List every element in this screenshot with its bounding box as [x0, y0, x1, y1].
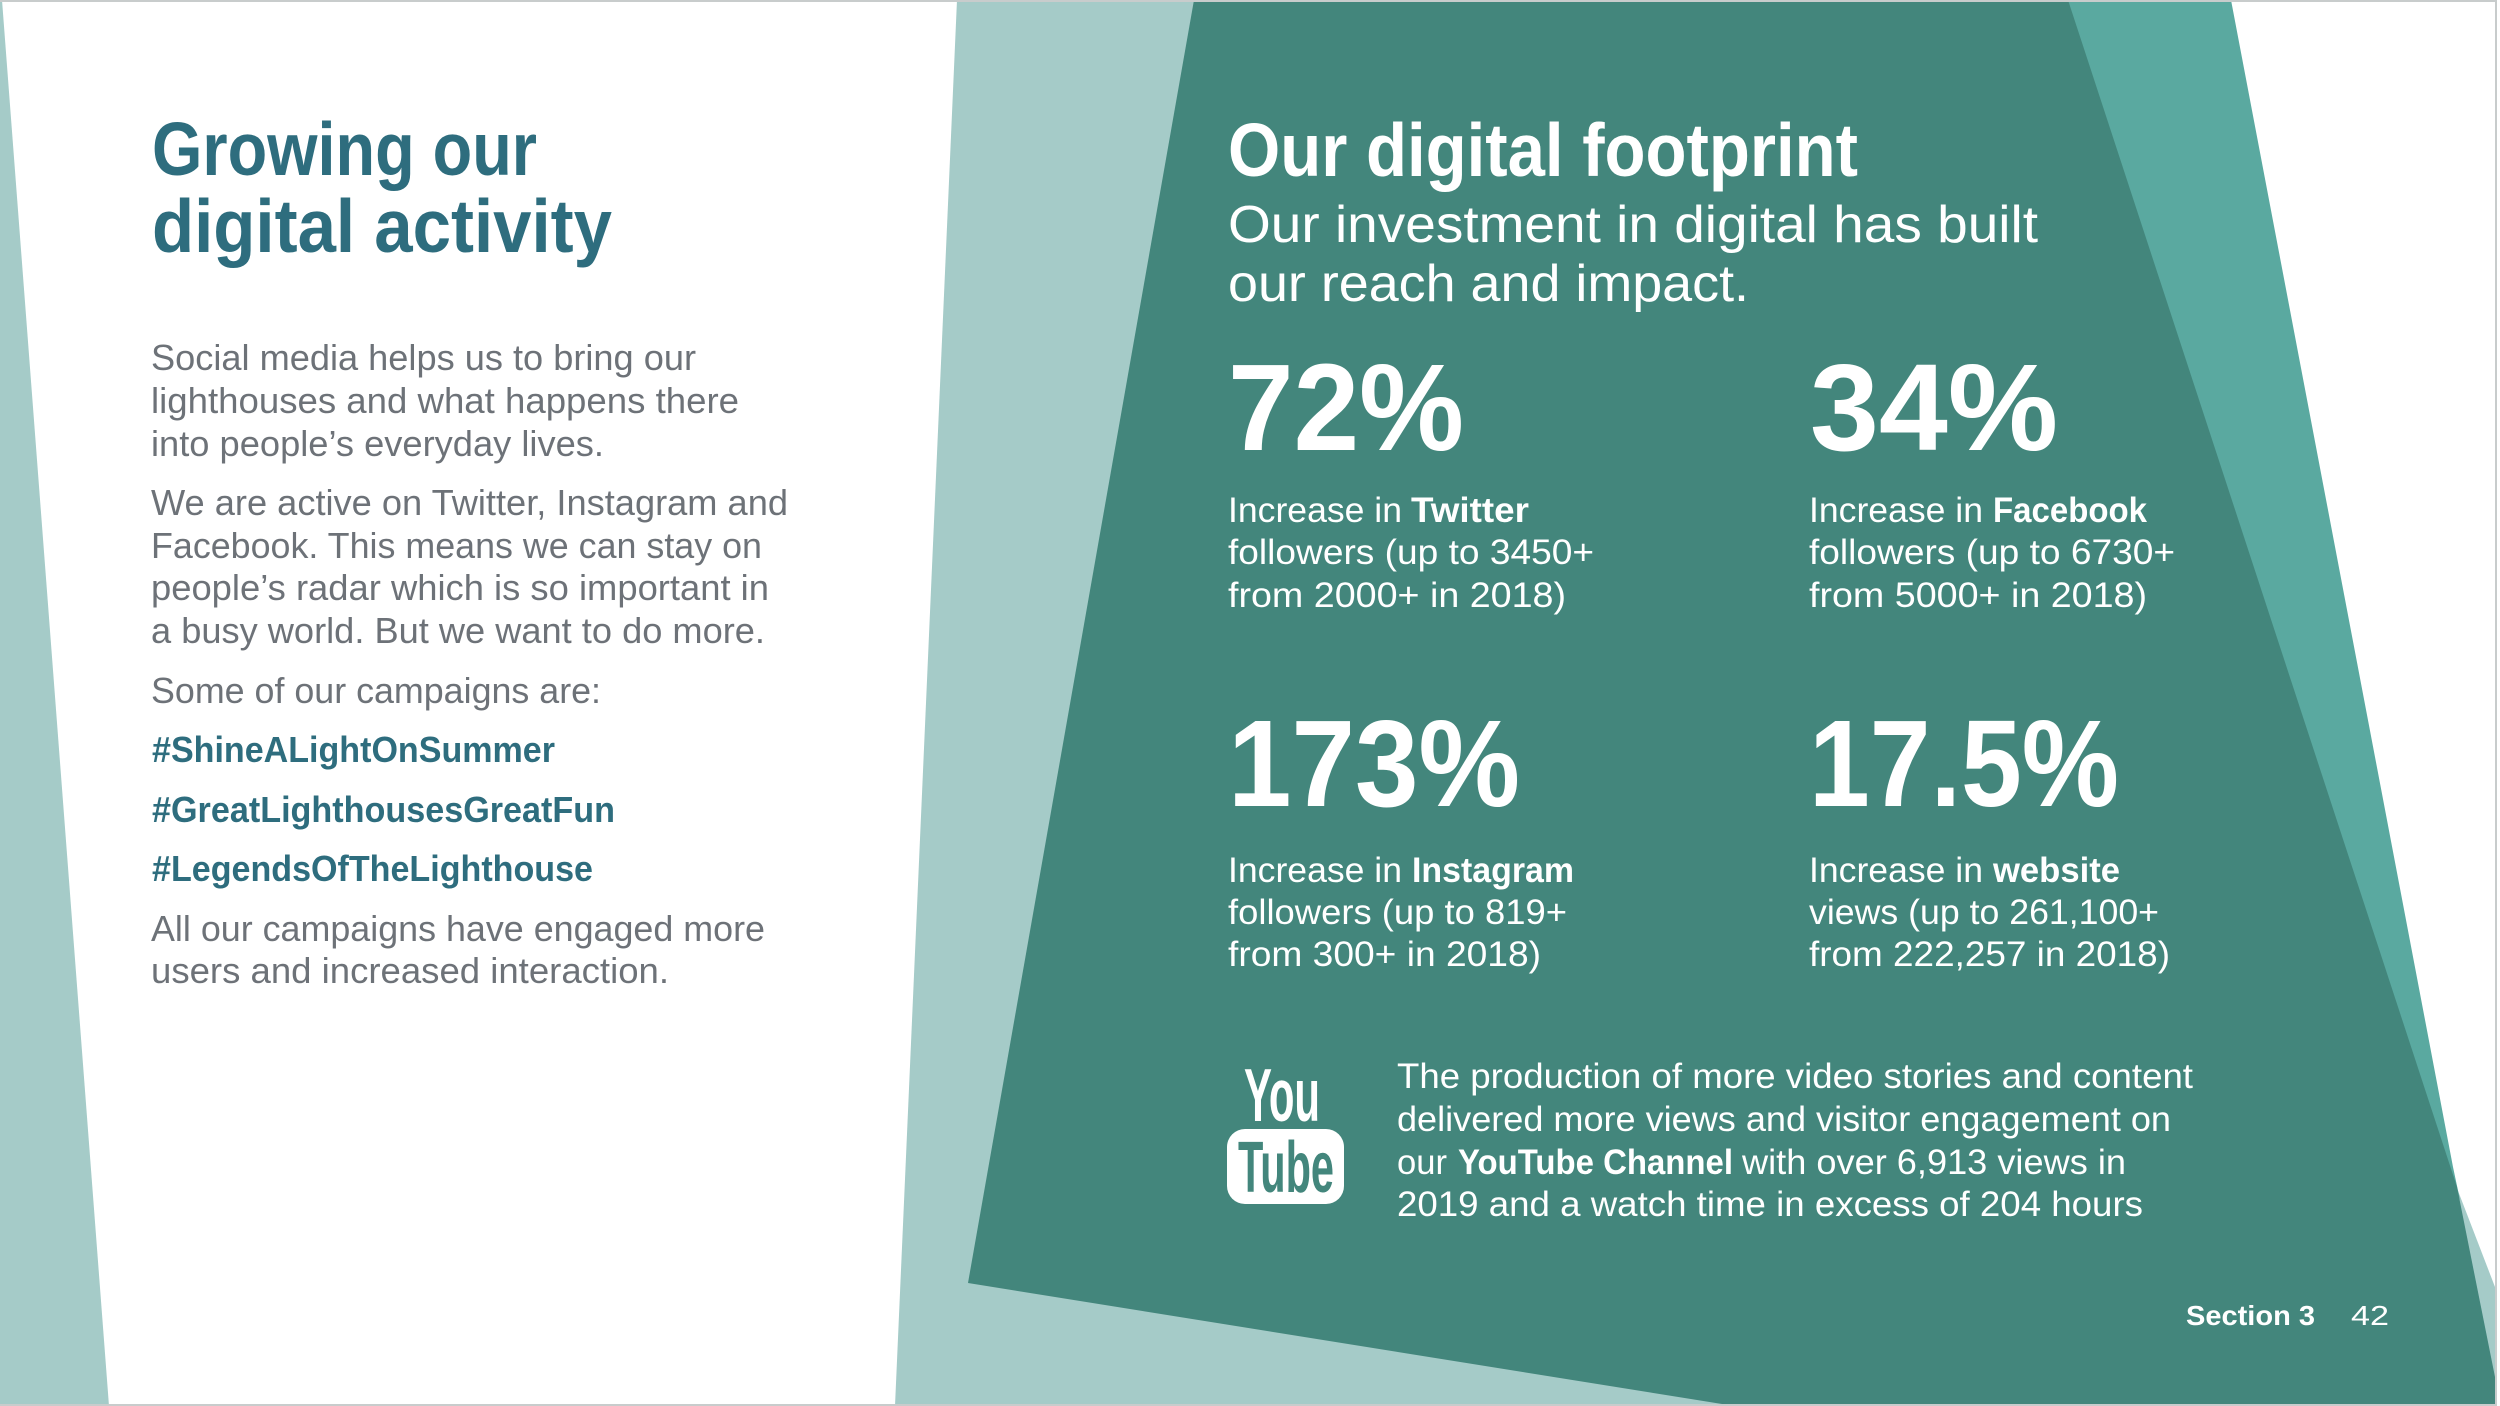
text block: YouTube description: our — [1397, 1143, 1447, 1182]
shape: mid teal wedge — [2060, 0, 2460, 1200]
icon: YouTube logo: You — [1244, 1053, 1320, 1137]
stat: Twitter: Increase in — [1228, 491, 1402, 530]
stat: Instagram: 173% — [1228, 696, 1520, 833]
stat: Instagram: Instagram — [1412, 851, 1574, 890]
text block: YouTube description: with over 6,913 views in — [1741, 1143, 2126, 1182]
panel: growing our digital activity — [151, 107, 788, 991]
footer: section and page number — [2186, 1300, 2389, 1331]
hashtag list: #ShineALightOnSummer — [152, 729, 555, 770]
text block: social media intro — [151, 337, 739, 464]
stat: website: views (up to 261,100+ — [1809, 893, 2159, 932]
stat: website: from 222,257 in 2018) — [1809, 935, 2170, 974]
stat: website: website — [1992, 851, 2120, 890]
text block: YouTube description — [1397, 1057, 2193, 1224]
stat: Twitter: 72% — [1228, 340, 1464, 477]
text block: YouTube description: The production of more video stories and content — [1397, 1057, 2193, 1096]
stat: Instagram: from 300+ in 2018) — [1228, 935, 1541, 974]
heading: Our digital footprint — [1228, 108, 1858, 192]
title: Growing our — [152, 107, 537, 191]
text block: campaigns outcome — [151, 908, 765, 991]
shape: light background wedge — [895, 0, 1800, 1406]
text block: active channels: We are active on Twitter, Instagram and — [151, 482, 788, 523]
subheading — [1228, 196, 2039, 313]
stat: Twitter — [1228, 340, 1594, 615]
icon: YouTube logo: Tube — [1238, 1128, 1334, 1208]
subheading: our reach and impact. — [1228, 255, 1749, 313]
hashtag list — [152, 729, 615, 889]
text block: campaigns outcome: users and increased interaction. — [151, 950, 669, 991]
title — [152, 107, 612, 268]
stat: Instagram: followers (up to 819+ — [1228, 893, 1567, 932]
shape: left light sliver — [0, 0, 109, 1406]
footer: section and page number: Section 3 — [2186, 1300, 2315, 1331]
text block: active channels: people’s radar which is so important in — [151, 567, 769, 608]
stat: Facebook: from 5000+ in 2018) — [1809, 576, 2147, 615]
panel: dark teal background — [968, 0, 2495, 1404]
text block: active channels: Facebook. This means we can stay on — [151, 525, 762, 566]
title: digital activity — [152, 184, 612, 268]
stat: Instagram — [1228, 696, 1574, 974]
text block: active channels — [151, 482, 788, 651]
panel: our digital footprint — [1227, 108, 2389, 1331]
icon: YouTube logo — [1227, 1053, 1344, 1208]
stat: Facebook: Facebook — [1993, 491, 2147, 530]
stat: Twitter: Twitter — [1411, 491, 1529, 530]
stat: Facebook: 34% — [1810, 340, 2058, 477]
text block: campaigns outcome: All our campaigns have engaged more — [151, 908, 765, 949]
text block: YouTube description: YouTube Channel — [1458, 1143, 1733, 1182]
text block: YouTube description: delivered more views and visitor engagement on — [1397, 1100, 2171, 1139]
stat: Facebook: Increase in — [1809, 491, 1983, 530]
stat: Facebook — [1809, 340, 2175, 615]
stat: Twitter: from 2000+ in 2018) — [1228, 576, 1566, 615]
stat: website — [1809, 696, 2170, 974]
text block: active channels: a busy world. But we want to do more. — [151, 610, 765, 651]
hashtag list: #GreatLighthousesGreatFun — [152, 789, 615, 830]
text block: YouTube description: 2019 and a watch time in excess of 204 hours — [1397, 1185, 2143, 1224]
stat: Instagram: Increase in — [1228, 851, 1402, 890]
stat: Twitter: followers (up to 3450+ — [1228, 533, 1594, 572]
hashtag list: #LegendsOfTheLighthouse — [152, 848, 593, 889]
text block: social media intro: into people’s everyday lives. — [151, 423, 604, 464]
shape: bottom right light wedge — [2400, 1170, 2495, 1406]
subheading: Our investment in digital has built — [1228, 196, 2039, 254]
stat: website: Increase in — [1809, 851, 1983, 890]
text block: social media intro: Social media helps us to bring our — [151, 337, 696, 378]
text block: campaigns intro: Some of our campaigns are: — [151, 670, 601, 711]
footer: section and page number: 42 — [2351, 1300, 2389, 1331]
text block: social media intro: lighthouses and what happens there — [151, 380, 739, 421]
stat: Facebook: followers (up to 6730+ — [1809, 533, 2175, 572]
stat: website: 17.5% — [1809, 696, 2119, 833]
